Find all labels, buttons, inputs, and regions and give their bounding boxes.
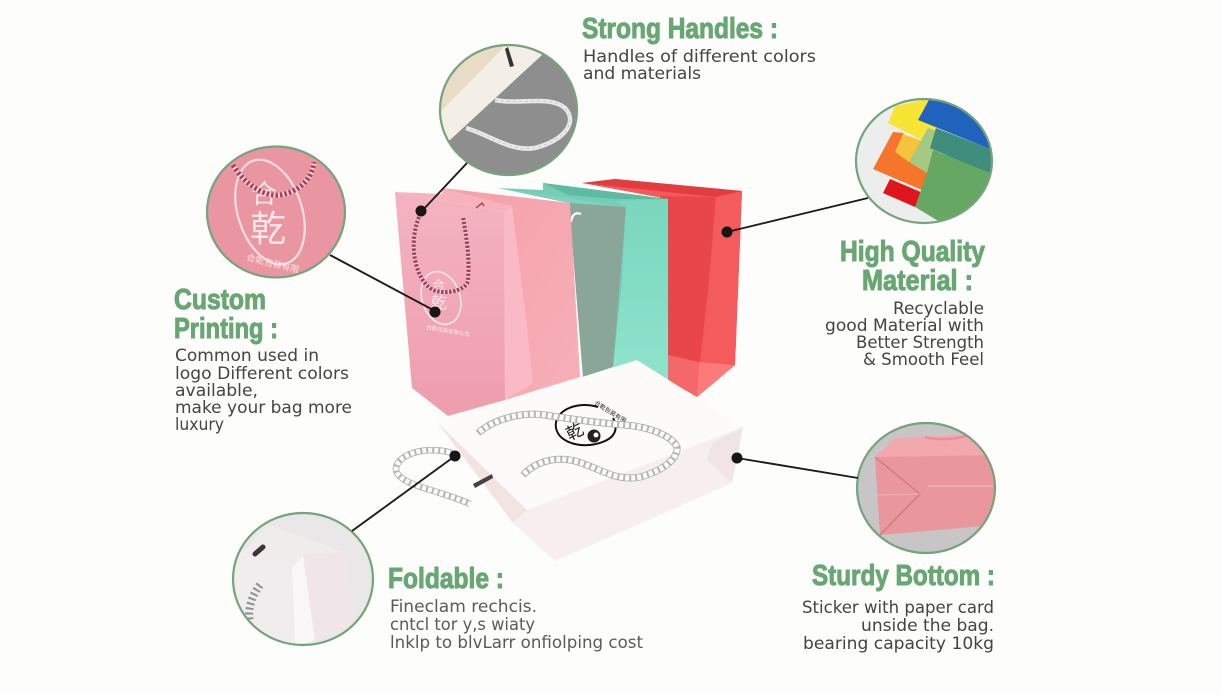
callout: custom printing detail circle: 合 (251, 174, 277, 211)
text block: sturdy bottom (802, 560, 995, 653)
text block: high quality material: good Material with (825, 316, 984, 335)
text block: foldable (388, 563, 644, 652)
callout: custom printing detail circle (205, 145, 347, 280)
text block: foldable: lnklp to blvLarr onfiolping cost (390, 633, 644, 652)
red bag (582, 179, 742, 397)
text block: high quality material: High Quality (840, 236, 985, 268)
text block: sturdy bottom: Sticker with paper card (802, 598, 994, 617)
white bag lying flat (396, 360, 743, 561)
text block: high quality material: & Smooth Feel (863, 350, 984, 369)
text block: custom printing (174, 284, 352, 434)
white logo on pink bag: 合乾包装有限公司 (426, 323, 470, 339)
text block: high quality material: Better Strength (856, 333, 984, 352)
callout: foldable detail circle (231, 511, 375, 647)
white logo on pink bag (415, 266, 470, 339)
product: group of paper bags (395, 179, 743, 561)
pink bag (395, 188, 580, 416)
text block: strong handles: Handles of different colors (583, 47, 816, 66)
text block: sturdy bottom: bearing capacity 10kg (803, 634, 994, 653)
callout: strong handles detail circle (438, 40, 580, 177)
leader line: custom printing (330, 255, 440, 318)
text block: strong handles: and materials (583, 64, 701, 83)
text block: custom printing: luxury (175, 415, 224, 434)
text block: sturdy bottom: unside the bag. (861, 616, 994, 635)
text block: custom printing: Custom (174, 284, 266, 316)
callout: sturdy bottom detail circle (855, 421, 997, 555)
leader line: sturdy bottom (732, 452, 858, 478)
text block: foldable: Fineclam rechcis. (390, 597, 537, 616)
text block: high quality material (825, 236, 985, 369)
text block: sturdy bottom: Sturdy Bottom : (812, 560, 995, 592)
text block: custom printing: available, (175, 381, 258, 400)
white logo on pink bag: 合 (432, 275, 445, 294)
black logo on white bag: 乾 (561, 415, 587, 445)
callout: custom printing detail circle: 合乾包装有限 (245, 250, 301, 276)
text block: strong handles: Strong Handles : (582, 13, 778, 45)
front rope handle (478, 414, 677, 478)
text block: custom printing: make your bag more (175, 398, 352, 417)
back rope handle (396, 450, 470, 504)
callout: custom printing detail circle: 乾 (250, 200, 286, 252)
text block: foldable: cntcl tor y,s wiaty (390, 615, 535, 634)
white logo on pink bag: 乾 (431, 289, 447, 313)
text block: foldable: Foldable : (388, 563, 504, 595)
black logo on white bag: 合乾包装有限 (593, 398, 628, 425)
text block: strong handles (582, 13, 816, 83)
black logo on white bag (556, 398, 628, 445)
leader line: strong handles (416, 163, 467, 216)
text block: high quality material: Recyclable (893, 299, 984, 318)
text block: high quality material: Material : (862, 265, 973, 297)
text block: custom printing: logo Different colors (175, 364, 349, 383)
text block: custom printing: Printing : (174, 313, 278, 345)
leader line: foldable (352, 450, 460, 531)
callout: material colour swatches circle (854, 94, 1000, 228)
pink bag rope handle (414, 217, 469, 292)
text block: custom printing: Common used in (175, 346, 319, 365)
mint and sage bag (498, 183, 668, 380)
leader line: material (722, 198, 868, 238)
